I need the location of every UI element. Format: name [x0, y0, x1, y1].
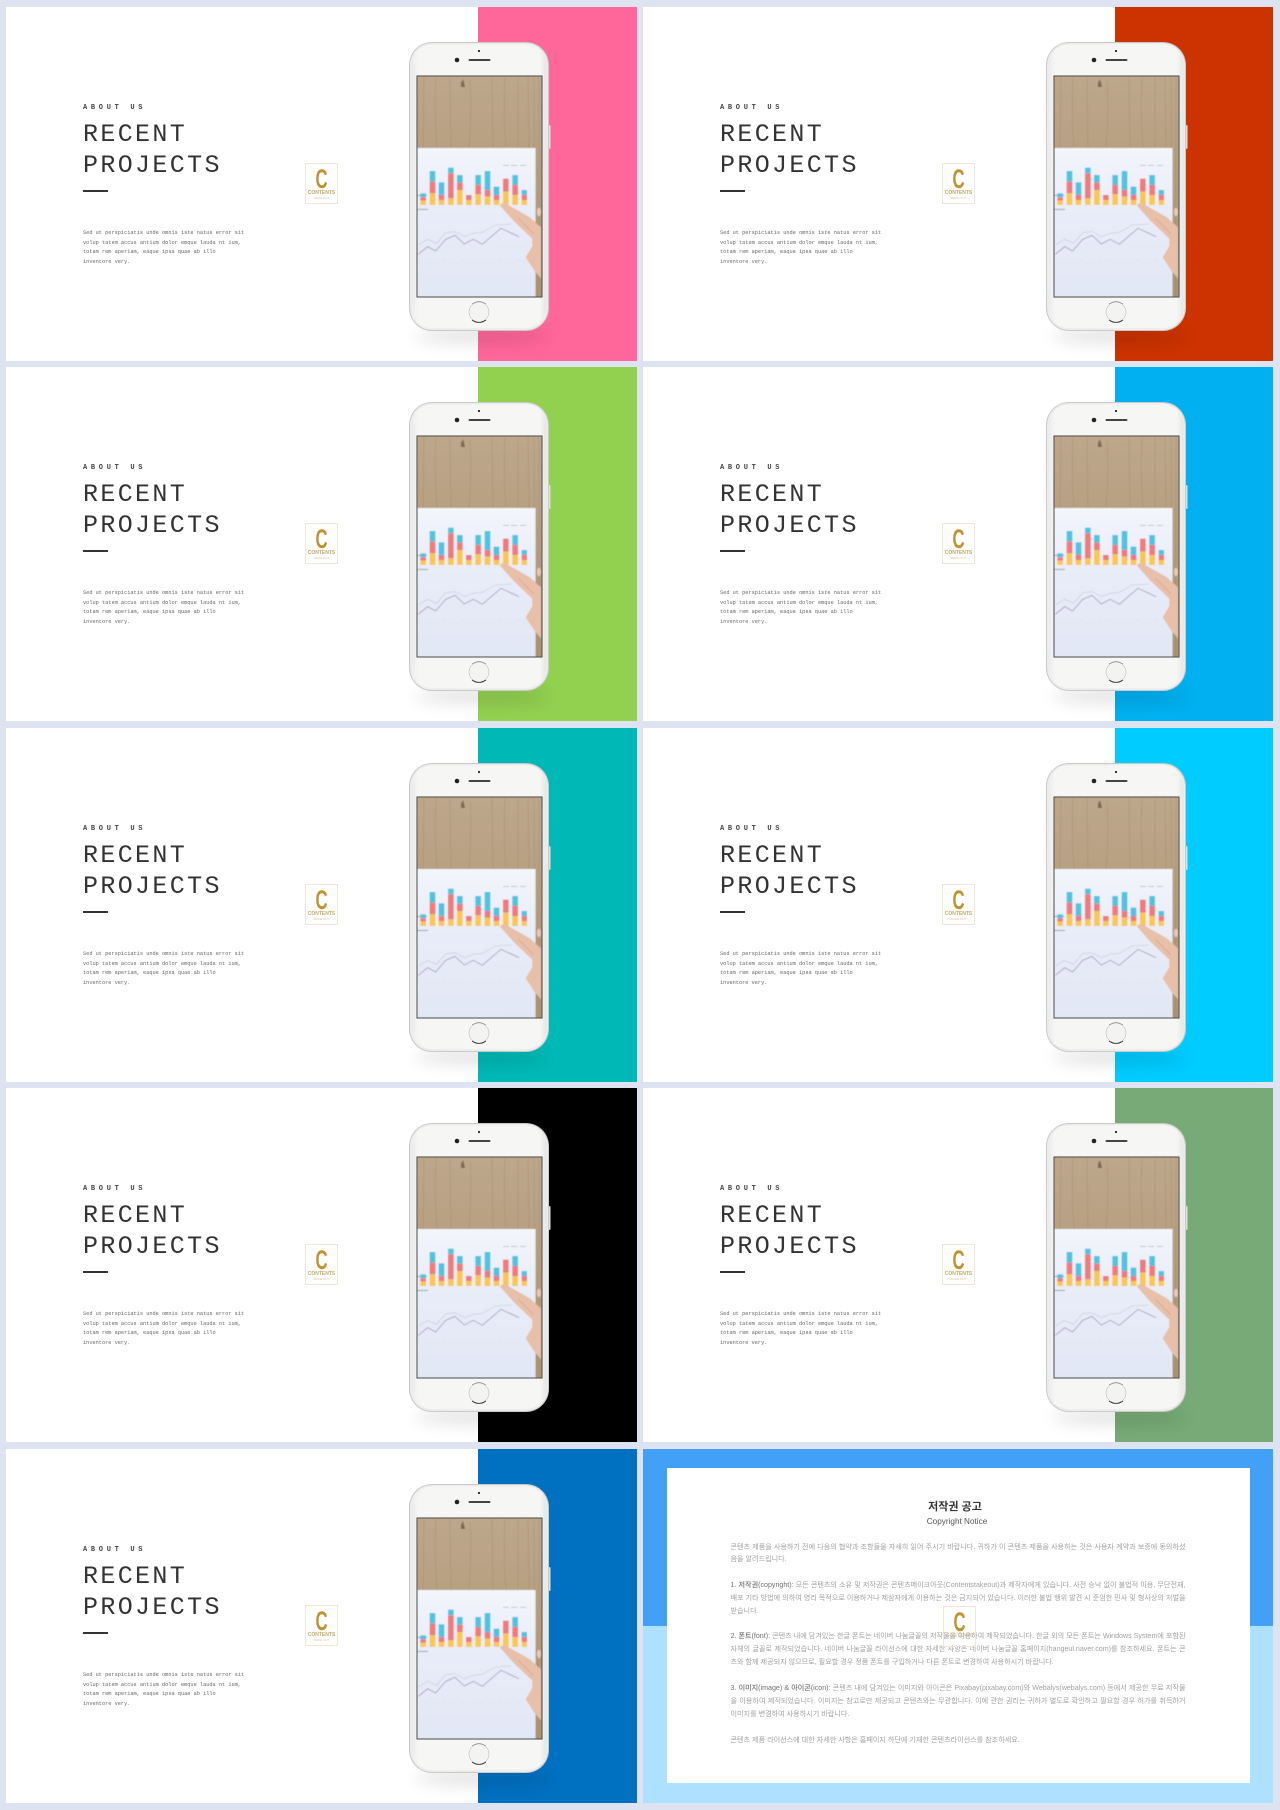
text block: heading and description: [720, 1184, 881, 1346]
text block: heading and description: PROJECTS: [83, 1593, 222, 1622]
phone mockup with chart photo: [409, 402, 550, 708]
colour band: green: [478, 367, 637, 721]
colour band: sage green: [1115, 1088, 1274, 1442]
panel: teal project slide: [6, 728, 637, 1082]
notice card: [666, 1468, 1250, 1782]
phone mockup with chart photo: [409, 1484, 550, 1790]
text block: heading and description: Sed ut perspiciatis unde omnis iste natus error sit: [83, 1311, 244, 1317]
text block: heading and description: Sed ut perspiciatis unde omnis iste natus error sit: [83, 230, 244, 236]
text block: heading and description: inventore very.: [720, 259, 767, 265]
text block: heading and description: inventore very.: [720, 980, 767, 986]
icon: gold logo: CONTENTS: [945, 1271, 972, 1277]
text block: heading and description: [83, 464, 244, 625]
icon: gold logo: CONTENTS: [308, 1271, 335, 1277]
colour band: sky blue: [1115, 367, 1274, 721]
phone mockup with chart photo: [409, 763, 550, 1068]
notice body text: 콘텐츠 제품 라이선스에 대한 자세한 사항은 홈페이지 하단에 기재한 콘텐츠라이선스를 참조하세요.: [730, 1736, 1020, 1744]
text block: heading and description: RECENT: [83, 1562, 187, 1591]
icon: gold logo overlay: [943, 1606, 976, 1647]
text block: heading and description: volup tatem accus antium dolor emque lauda nt ium,: [83, 961, 241, 967]
text block: heading and description: Sed ut perspiciatis unde omnis iste natus error sit: [720, 951, 881, 957]
icon: gold logo: C: [952, 1245, 965, 1275]
icon: gold logo: C: [952, 524, 965, 554]
text block: heading and description: PROJECTS: [720, 1232, 859, 1261]
text block: heading and description: ABOUT US: [83, 1184, 146, 1192]
text block: heading and description: Sed ut perspiciatis unde omnis iste natus error sit: [83, 1672, 244, 1678]
icon: gold logo: [305, 523, 338, 564]
notice body text: 콘텐츠 제품을 사용하기 전에 다음의 협약과 조항들을 자세히 읽어 주시기 바랍니다. 귀하가 이 콘텐츠 제품을 사용하는 것은 사용자 계약과 보증에 동의하셨: [730, 1543, 1186, 1551]
panel: green project slide: [6, 367, 637, 720]
colour band: royal blue: [478, 1449, 637, 1803]
text block: heading and description: ABOUT US: [83, 464, 146, 472]
text block: heading and description: Sed ut perspiciatis unde omnis iste natus error sit: [720, 1311, 881, 1317]
text block: heading and description: [720, 824, 881, 986]
text block: heading and description: ABOUT US: [720, 104, 783, 112]
notice body text: [730, 1543, 1186, 1744]
icon: gold logo: MAKE OUT: [951, 196, 966, 200]
panel: cyan project slide: [643, 728, 1273, 1082]
text block: heading and description: totam rem aperiam, eaque ipsa quae ab illo: [83, 970, 216, 976]
notice title: 저작권 공고: [928, 1501, 982, 1513]
text block: heading and description: PROJECTS: [720, 151, 859, 180]
text block: heading and description: [720, 464, 881, 625]
icon: gold logo: MAKE OUT: [314, 1277, 329, 1281]
text block: heading and description: ABOUT US: [720, 1184, 783, 1192]
text block: heading and description: totam rem aperiam, eaque ipsa quae ab illo: [83, 1691, 216, 1697]
notice body text: 배포 기타 방법에 의하여 영리 목적으로 이용하거나 제삼자에게 이용하는 것은 금지되어 있습니다. 이러한 불법 행위 발견 시 준엄한 민사 및 형사상의 처벌을: [730, 1594, 1186, 1602]
icon: gold logo: MAKE OUT: [314, 917, 329, 921]
icon: gold logo: [305, 1244, 338, 1285]
text block: heading and description: [83, 824, 244, 986]
text block: heading and description: totam rem aperiam, eaque ipsa quae ab illo: [83, 609, 216, 615]
text block: heading and description: RECENT: [83, 841, 187, 870]
icon: gold logo: CONTENTS: [945, 550, 972, 556]
icon: gold logo: MAKE OUT: [314, 556, 329, 560]
text block: heading and description: totam rem aperiam, eaque ipsa quae ab illo: [720, 249, 853, 255]
colour band: teal: [478, 728, 637, 1082]
text block: heading and description: ABOUT US: [83, 824, 146, 832]
text block: heading and description: RECENT: [720, 1201, 824, 1230]
colour band: cyan: [1115, 728, 1274, 1082]
icon: gold logo: CONTENTS: [945, 190, 972, 196]
text block: heading and description: PROJECTS: [83, 151, 222, 180]
text block: heading and description: volup tatem accus antium dolor emque lauda nt ium,: [720, 600, 878, 606]
panel: sage green project slide: [643, 1088, 1273, 1442]
text block: heading and description: [83, 1184, 244, 1346]
text block: heading and description: volup tatem accus antium dolor emque lauda nt ium,: [83, 600, 241, 606]
text block: heading and description: Sed ut perspiciatis unde omnis iste natus error sit: [720, 590, 881, 596]
notice subtitle: Copyright Notice: [927, 1517, 987, 1526]
text block: heading and description: RECENT: [720, 480, 824, 509]
notice body text: 받습니다.: [730, 1607, 759, 1615]
icon: gold logo: CONTENTS: [308, 550, 335, 556]
panel: copyright notice: [643, 1449, 1273, 1802]
icon: gold logo: MAKE OUT: [951, 1277, 966, 1281]
panel: sky blue project slide: [643, 367, 1273, 720]
phone mockup with chart photo: [1046, 402, 1188, 708]
icon: gold logo: CONTENTS: [308, 911, 335, 917]
notice body text: 츠와 함께 제공되지 않으므로, 필요할 경우 정품 폰트를 구입하거나 다른 폰트로 변경하여 사용하시기 바랍니다.: [730, 1658, 1054, 1666]
text block: heading and description: totam rem aperiam, eaque ipsa quae ab illo: [83, 249, 216, 255]
phone mockup with chart photo: [1046, 1123, 1188, 1428]
icon: gold logo: MAKE OUT: [951, 556, 966, 560]
icon: gold logo: CONTENTS: [308, 1632, 335, 1638]
icon: gold logo: MAKE OUT: [314, 196, 329, 200]
icon: gold logo: [942, 1244, 975, 1285]
text block: heading and description: totam rem aperiam, eaque ipsa quae ab illo: [720, 1330, 853, 1336]
text block: heading and description: ABOUT US: [720, 464, 783, 472]
text block: heading and description: PROJECTS: [83, 1232, 222, 1261]
text block: heading and description: RECENT: [83, 120, 187, 149]
text block: heading and description: volup tatem accus antium dolor emque lauda nt ium,: [83, 240, 241, 246]
text block: heading and description: Sed ut perspiciatis unde omnis iste natus error sit: [83, 951, 244, 957]
icon: gold logo: C: [315, 164, 328, 194]
text block: heading and description: volup tatem accus antium dolor emque lauda nt ium,: [83, 1682, 241, 1688]
panel: black project slide: [6, 1088, 637, 1442]
text block: heading and description: ABOUT US: [83, 1546, 146, 1554]
notice body text: 이미지를 변경하여 사용하시기 바랍니다.: [730, 1710, 849, 1718]
text block: heading and description: inventore very.: [83, 980, 130, 986]
text block: heading and description: volup tatem accus antium dolor emque lauda nt ium,: [83, 1321, 241, 1327]
notice body text: 2. 폰트(font): 콘텐츠 내에 담겨있는 한글 폰트는 네이버 나눔글꼴의 저작물을 이용하여 제작되었습니다. 한글 외의 모든 폰트는 Windows System에 포함된: [730, 1632, 1186, 1640]
icon: gold logo overlay: CONTENTS: [946, 1633, 973, 1639]
upper blue background: [643, 1449, 1273, 1626]
text block: heading and description: inventore very.: [720, 1340, 767, 1346]
icon: gold logo: [305, 884, 338, 925]
icon: gold logo: C: [315, 1245, 328, 1275]
text block: heading and description: volup tatem accus antium dolor emque lauda nt ium,: [720, 961, 878, 967]
text block: heading and description: PROJECTS: [83, 872, 222, 901]
text block: heading and description: volup tatem accus antium dolor emque lauda nt ium,: [720, 240, 878, 246]
text block: heading and description: totam rem aperiam, eaque ipsa quae ab illo: [83, 1330, 216, 1336]
text block: heading and description: inventore very.: [83, 259, 130, 265]
text block: heading and description: ABOUT US: [720, 824, 783, 832]
icon: gold logo: C: [952, 885, 965, 915]
panel: red project slide: [643, 7, 1273, 360]
text block: heading and description: PROJECTS: [720, 872, 859, 901]
text block: heading and description: PROJECTS: [720, 511, 859, 540]
text block: heading and description: Sed ut perspiciatis unde omnis iste natus error sit: [720, 230, 881, 236]
text block: heading and description: inventore very.: [83, 1701, 130, 1707]
icon: gold logo: C: [315, 1606, 328, 1636]
notice body text: 3. 이미지(image) & 아이콘(icon): 콘텐츠 내에 담겨있는 이미지와 아이콘은 Pixabay(pixabay.com)와 Webalys(webalys.com) 등에서 제공한 무료 저작물: [730, 1684, 1186, 1692]
text block: heading and description: totam rem aperiam, eaque ipsa quae ab illo: [720, 609, 853, 615]
text block: heading and description: [720, 104, 881, 265]
icon: gold logo: MAKE OUT: [314, 1638, 329, 1642]
icon: gold logo: MAKE OUT: [951, 917, 966, 921]
panel: royal blue project slide: [6, 1449, 637, 1802]
text block: heading and description: RECENT: [83, 480, 187, 509]
phone mockup with chart photo: [1046, 42, 1188, 348]
text block: heading and description: inventore very.: [720, 619, 767, 625]
panel: pink project slide: [6, 7, 637, 360]
icon: gold logo: C: [315, 524, 328, 554]
text block: heading and description: RECENT: [720, 120, 824, 149]
icon: gold logo overlay: C: [953, 1607, 966, 1637]
icon: gold logo: [942, 523, 975, 564]
phone mockup with chart photo: [409, 42, 550, 348]
phone mockup with chart photo: [409, 1123, 550, 1428]
icon: gold logo: [942, 884, 975, 925]
text block: heading and description: ABOUT US: [83, 104, 146, 112]
text block: heading and description: RECENT: [83, 1201, 187, 1230]
colour band: red: [1115, 7, 1274, 361]
text block: heading and description: [83, 104, 244, 265]
text block: heading and description: PROJECTS: [83, 511, 222, 540]
text block: heading and description: inventore very.: [83, 619, 130, 625]
icon: gold logo: C: [952, 164, 965, 194]
notice body text: 1. 저작권(copyright): 모든 콘텐츠의 소유 및 저작권은 콘텐츠메이크아웃(Contentstakeout)과 제작자에게 있습니다. 사전 승낙 없이 불법적 이용, 무단전재,: [730, 1581, 1185, 1589]
phone mockup with chart photo: [1046, 763, 1188, 1068]
icon: gold logo: [305, 1605, 338, 1646]
text block: heading and description: [83, 1546, 244, 1707]
icon: gold logo: [942, 163, 975, 204]
text block: heading and description: totam rem aperiam, eaque ipsa quae ab illo: [720, 970, 853, 976]
text block: heading and description: volup tatem accus antium dolor emque lauda nt ium,: [720, 1321, 878, 1327]
icon: gold logo: CONTENTS: [945, 911, 972, 917]
icon: gold logo: CONTENTS: [308, 190, 335, 196]
icon: gold logo: C: [315, 885, 328, 915]
text block: heading and description: inventore very.: [83, 1340, 130, 1346]
icon: gold logo: [305, 163, 338, 204]
colour band: black: [478, 1088, 637, 1442]
notice body text: 음을 알려드립니다.: [730, 1555, 787, 1563]
text block: heading and description: RECENT: [720, 841, 824, 870]
text block: heading and description: Sed ut perspiciatis unde omnis iste natus error sit: [83, 590, 244, 596]
colour band: pink: [478, 7, 637, 361]
